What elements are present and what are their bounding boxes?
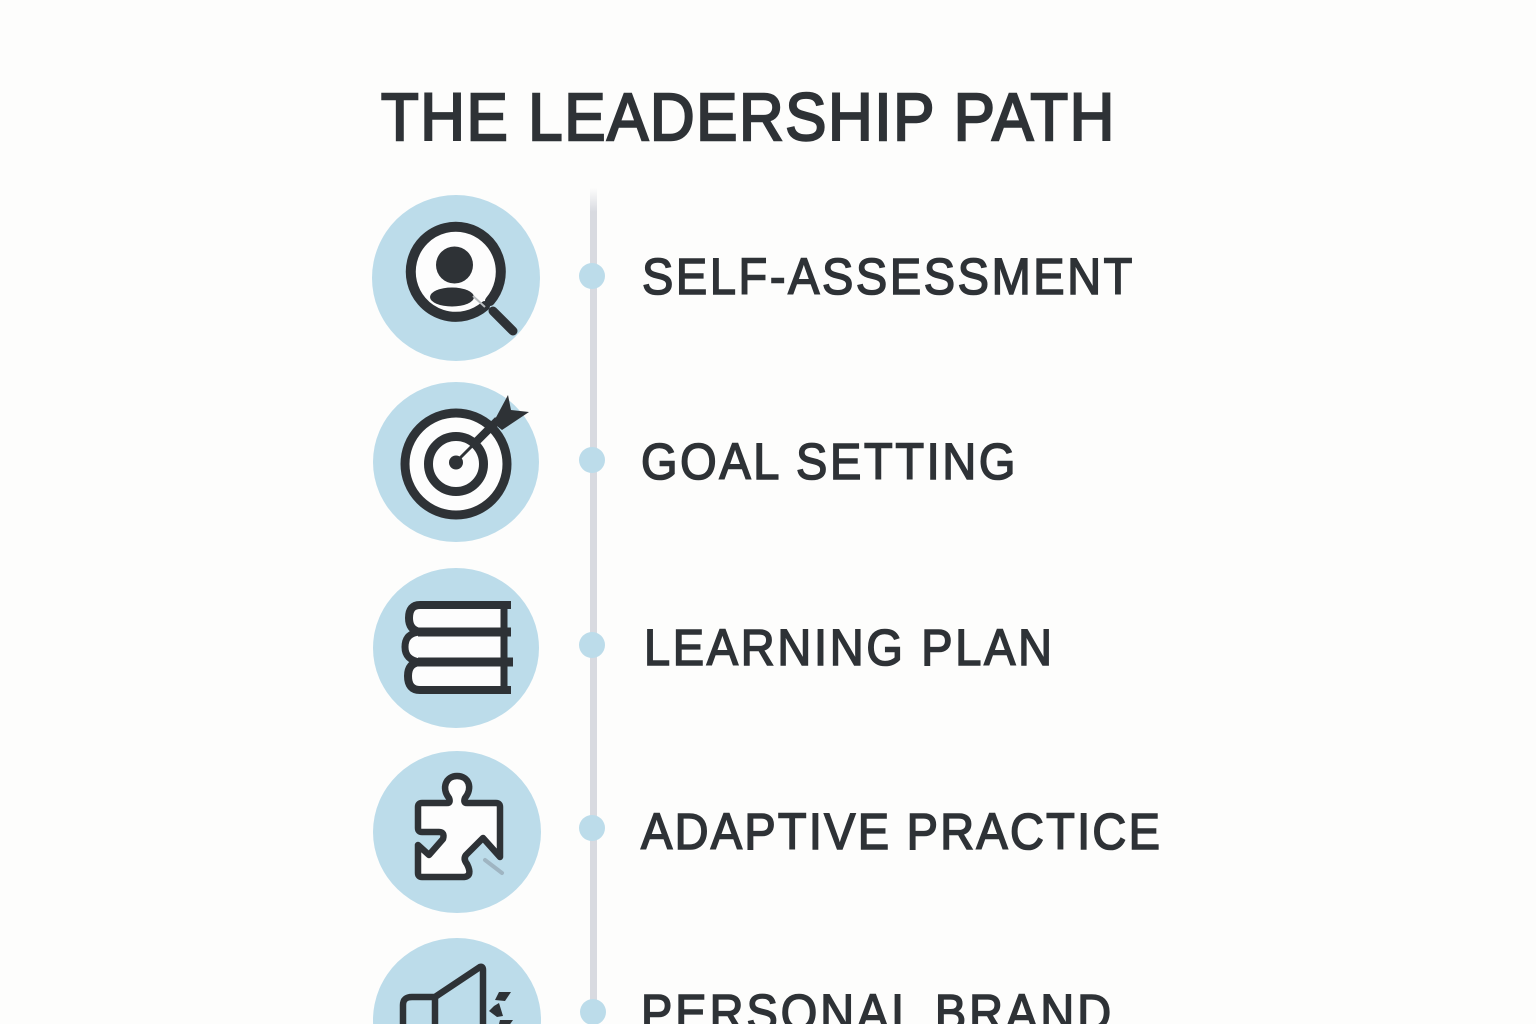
label: self-assessment: SELF-ASSESSMENT (642, 249, 1132, 305)
step 1: self-assessment (372, 195, 1132, 361)
icon: megaphone (373, 938, 541, 1024)
icon: target with arrow (373, 382, 539, 542)
step 3: learning plan (373, 568, 1052, 728)
icon: magnifier over person (372, 195, 540, 361)
icon: puzzle piece (373, 751, 541, 913)
timeline dot 1 (579, 263, 605, 289)
title: THE LEADERSHIP PATH (381, 80, 1114, 155)
label: adaptive practice: ADAPTIVE PRACTICE (641, 804, 1160, 860)
label: goal setting: GOAL SETTING (641, 434, 1015, 490)
timeline line (590, 188, 597, 1024)
step 4: adaptive practice (373, 751, 1160, 913)
step 5: personal brand (373, 938, 1111, 1024)
timeline dot 3 (579, 632, 605, 658)
timeline dot 2 (579, 447, 605, 473)
step 2: goal setting (373, 382, 1015, 542)
timeline dot 4 (579, 815, 605, 841)
icon: stack of books (373, 568, 539, 728)
label: learning plan: LEARNING PLAN (644, 620, 1052, 676)
timeline dot 5 (580, 999, 606, 1024)
